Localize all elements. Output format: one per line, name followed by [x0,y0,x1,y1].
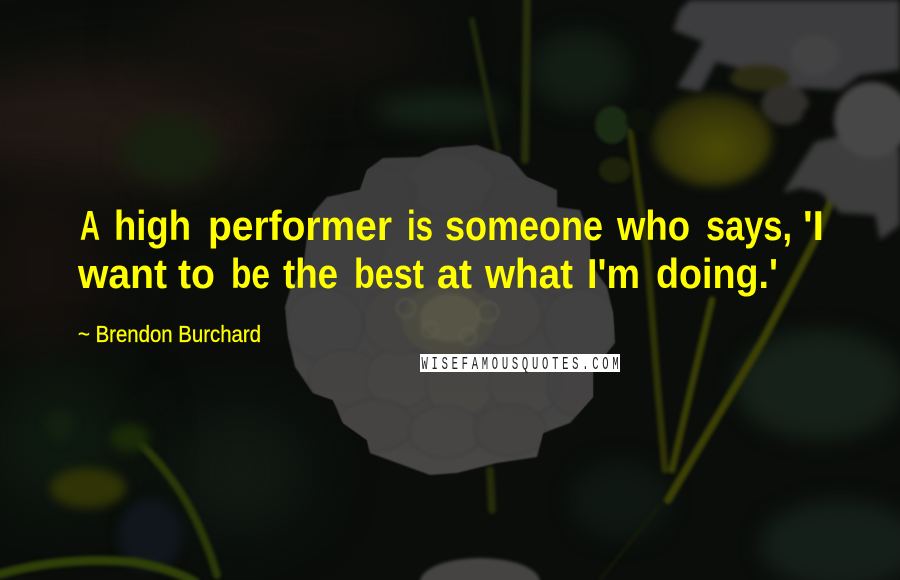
quote line 2: want [77,250,167,297]
quote line 2: what [484,250,573,297]
quote line 2: be [231,250,270,297]
quote line 1: who [616,202,690,249]
quote line 1: A [80,202,100,249]
white flower top right [673,0,900,240]
quote line 1: is [407,202,433,249]
flower petals [287,155,616,458]
quote text [77,202,824,297]
white dahlia flower [285,145,616,475]
flower centre [397,284,498,356]
quote line 2: I'm [587,250,640,297]
quote line 2: to [178,250,215,297]
quote line 1: 'I [803,202,824,249]
quote line 1: performer [208,202,392,249]
quote line 2: doing.' [656,250,778,297]
quote line 1: high [114,202,191,249]
quote line 2: at [437,250,472,297]
watermark badge: WISEFAMOUSQUOTES.COM [422,356,619,375]
blurred yellow bud [652,94,772,186]
quote line 2 [77,250,778,297]
flower at bottom edge [420,558,540,580]
quote line 1 [80,202,824,249]
quote line 2: the [283,250,338,297]
quote line 2: best [354,250,424,297]
lower left yellow bud [46,409,150,508]
quote line 1: someone [445,202,603,249]
small green bud [595,106,654,183]
quote line 1: says, [706,202,792,249]
author attribution: ~ Brendon Burchard [78,321,261,347]
